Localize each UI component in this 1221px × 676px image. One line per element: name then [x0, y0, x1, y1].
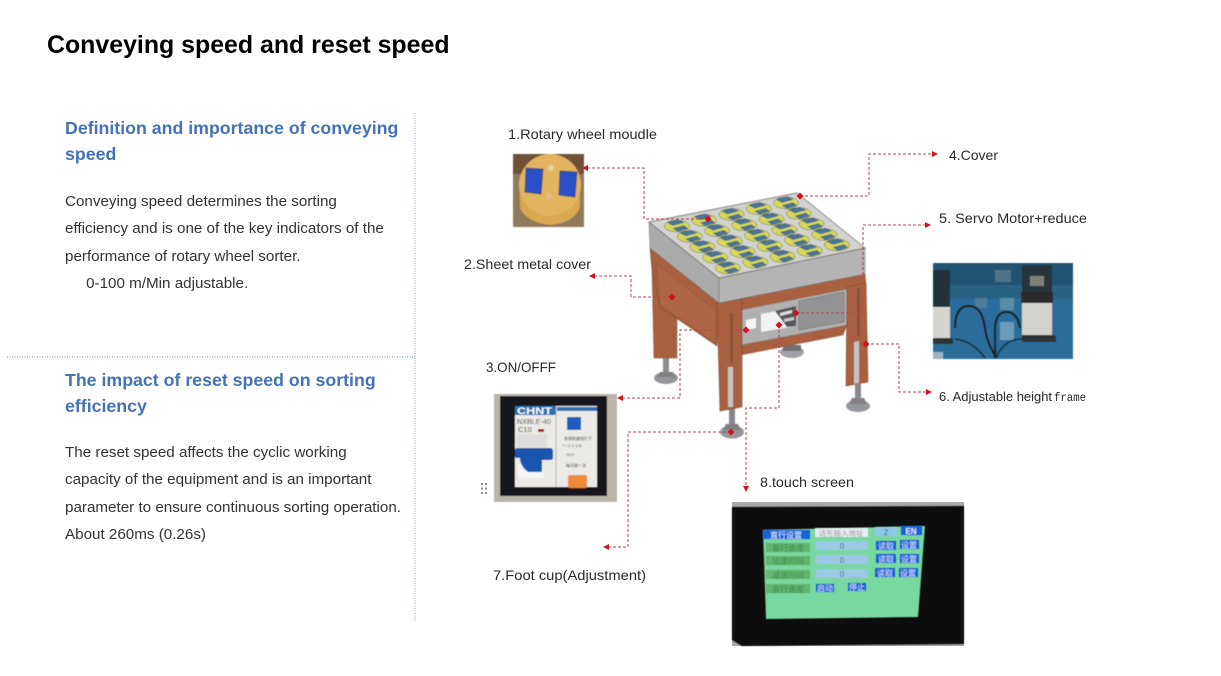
control panel: [741, 289, 847, 345]
component labels: 7.Foot cup(Adjustment): [493, 567, 646, 583]
wheel grid: 5 by 5 wheels: [664, 196, 850, 274]
leader 2: sheet metal cover: [594, 276, 672, 297]
text block: reset speed: The reset speed affects the cyclic working: [65, 444, 347, 461]
text block: conveying speed: [65, 193, 384, 292]
photo: touch screen: 停止: [849, 582, 865, 592]
leader lines and arrows: [587, 154, 934, 547]
leader 3: on/off: [622, 330, 746, 398]
photo: touch screen: 减速时间: [772, 570, 804, 580]
photo: touch screen: 设置: [900, 568, 916, 578]
text block: reset speed: capacity of the equipment and is an important: [65, 471, 371, 488]
photo: touch screen: 读取: [878, 541, 894, 551]
photo: circuit breaker: C10: [518, 425, 532, 434]
photo: circuit breaker: 每月按一次: [566, 462, 586, 468]
component labels: 3.ON/OFFF: [486, 359, 556, 375]
text block: conveying speed: performance of rotary wheel sorter.: [65, 248, 301, 265]
leader 8: touch screen: [746, 325, 779, 487]
text block: conveying speed: efficiency and is one of the key indicators of the: [65, 220, 384, 237]
photo: touch screen: 设置: [901, 554, 917, 564]
photo: touch screen: 直行设置: [770, 530, 802, 540]
icon: drag handle: [481, 483, 487, 494]
frame: apron and beams: [650, 248, 866, 355]
photo: touch screen: 启动: [817, 583, 833, 593]
photo: touch screen: 读取: [877, 568, 893, 578]
text block: conveying speed: Conveying speed determines the sorting: [65, 193, 337, 210]
text block: conveying speed: 0-100 m/Min adjustable.: [86, 275, 248, 292]
photo: servo motor and reducer: [933, 263, 1073, 359]
component labels: frame: [1054, 392, 1086, 405]
component labels: 4.Cover: [949, 147, 998, 163]
photo: touch screen: 读取: [878, 554, 894, 564]
photo: circuit breaker: [494, 394, 617, 502]
leader 7: foot cup: [608, 432, 731, 547]
photo: touch screen: 2: [884, 528, 889, 537]
photo: touch screen: 直行速度: [772, 584, 804, 594]
front legs: [717, 283, 870, 438]
photo: touch screen: 0: [840, 556, 845, 565]
leader 1: rotary wheel module: [587, 168, 708, 219]
text block: reset speed: About 260ms (0.26s): [65, 526, 206, 543]
heading: impact of reset speed: The impact of reset speed on sorting efficiency: [65, 370, 376, 416]
component labels: 8.touch screen: [760, 474, 854, 490]
photo: touch screen: 0: [840, 570, 845, 579]
photo: touch screen: 设置: [901, 540, 917, 550]
heading: definition of conveying speed: Definition and importance of conveying speed: [65, 118, 398, 164]
component labels: 5. Servo Motor+reduce: [939, 210, 1087, 226]
photo: circuit breaker: 合用防遮挡片下: [564, 435, 592, 441]
back feet and legs: [652, 270, 804, 384]
component labels: 1.Rotary wheel moudle: [508, 126, 657, 142]
machine: rotary wheel sorter: [649, 193, 870, 438]
photo: touch screen: 加速时间: [772, 556, 804, 566]
photo: circuit breaker: TEST: [566, 453, 576, 457]
photo: circuit breaker: CHNT: [517, 406, 553, 416]
text block: reset speed: [65, 444, 401, 543]
title: Conveying speed and reset speed: [47, 31, 450, 59]
photo: circuit breaker: T I X X S B: [562, 443, 582, 448]
photo: rotary wheel module: [513, 154, 584, 227]
component labels: 2.Sheet metal cover: [464, 256, 591, 272]
photo: touch screen: EN: [905, 527, 917, 536]
photo: touch screen: 0: [840, 542, 845, 551]
cover housing: [649, 193, 865, 303]
leader 5: servo motor: [796, 225, 926, 313]
component labels: [464, 126, 1087, 583]
text block: reset speed: parameter to ensure continuous sorting operation.: [65, 499, 401, 516]
leader 6: adjustable frame: [866, 344, 928, 392]
photo: touch screen: 直行速度: [772, 543, 804, 553]
photo: touch screen: [732, 502, 964, 646]
leader 4: cover: [800, 154, 934, 196]
photo: touch screen: 请先输入地址: [818, 528, 864, 538]
component labels: 6. Adjustable height: [939, 390, 1053, 404]
arrowheads and anchor points: [582, 151, 938, 550]
photo: circuit breaker: NXBLE-40: [517, 417, 551, 426]
